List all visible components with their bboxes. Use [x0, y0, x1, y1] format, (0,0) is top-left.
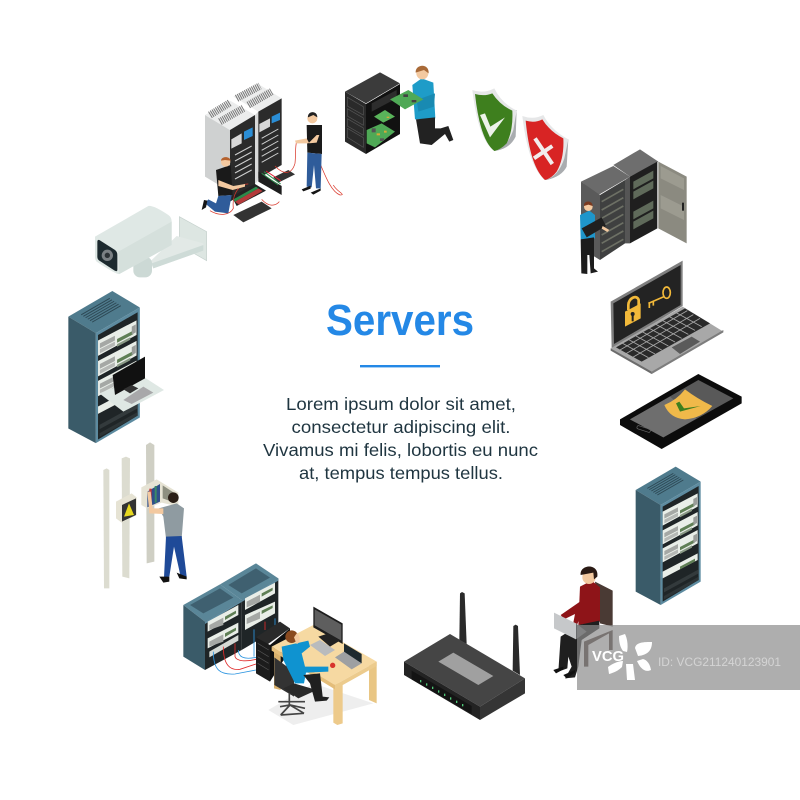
title underline	[360, 365, 440, 367]
illustration: technicians wiring server racks	[202, 84, 342, 222]
illustration: technician with motherboards at tower	[345, 66, 453, 154]
icon: red shield with cross	[522, 115, 568, 180]
body text: at, tempus tempus tellus.	[299, 463, 503, 483]
desk	[272, 625, 377, 725]
server rack with monitor shelf	[68, 291, 164, 443]
body text: consectetur adipiscing elit.	[292, 417, 510, 437]
keyboard shelf and monitor	[99, 357, 164, 412]
title: Servers	[326, 296, 474, 345]
watermark logo text: VCG	[592, 648, 624, 665]
monitor and keyboard	[310, 607, 343, 656]
seated engineer on office chair	[274, 630, 335, 715]
server rack: right	[636, 467, 701, 605]
watermark logo petals	[608, 634, 652, 680]
technician holding server unit	[580, 201, 609, 274]
kneeling technician with board	[390, 66, 453, 145]
icon: green shield with check	[472, 88, 517, 151]
illustration: wall mounted security camera	[95, 206, 207, 277]
watermark id text: ID: VCG211240123901	[658, 655, 781, 669]
illustration: open server cabinets with technician	[580, 149, 687, 274]
illustration: technician at electrical panels on poles	[103, 442, 187, 588]
watermark band	[577, 625, 800, 690]
illustration: person on chair with laptop	[553, 566, 613, 678]
illustration: wifi router	[404, 592, 525, 720]
desktop tower	[256, 622, 290, 682]
illustration: engineer at desk beside server racks	[183, 563, 377, 725]
warning panel	[116, 493, 137, 523]
desk laptop	[335, 643, 362, 669]
illustration: smartphone with shield	[620, 374, 742, 449]
body text: Lorem ipsum dolor sit amet,	[286, 394, 516, 414]
kneeling technician	[202, 157, 245, 213]
body text	[263, 394, 538, 483]
illustration: laptop with lock and key	[611, 261, 723, 374]
body text: Vivamus mi felis, lobortis eu nunc	[263, 440, 538, 460]
open panel	[141, 479, 178, 508]
standing technician	[295, 112, 322, 195]
technician from behind	[147, 492, 187, 583]
icon: key	[648, 287, 670, 308]
icon: padlock	[625, 297, 641, 327]
